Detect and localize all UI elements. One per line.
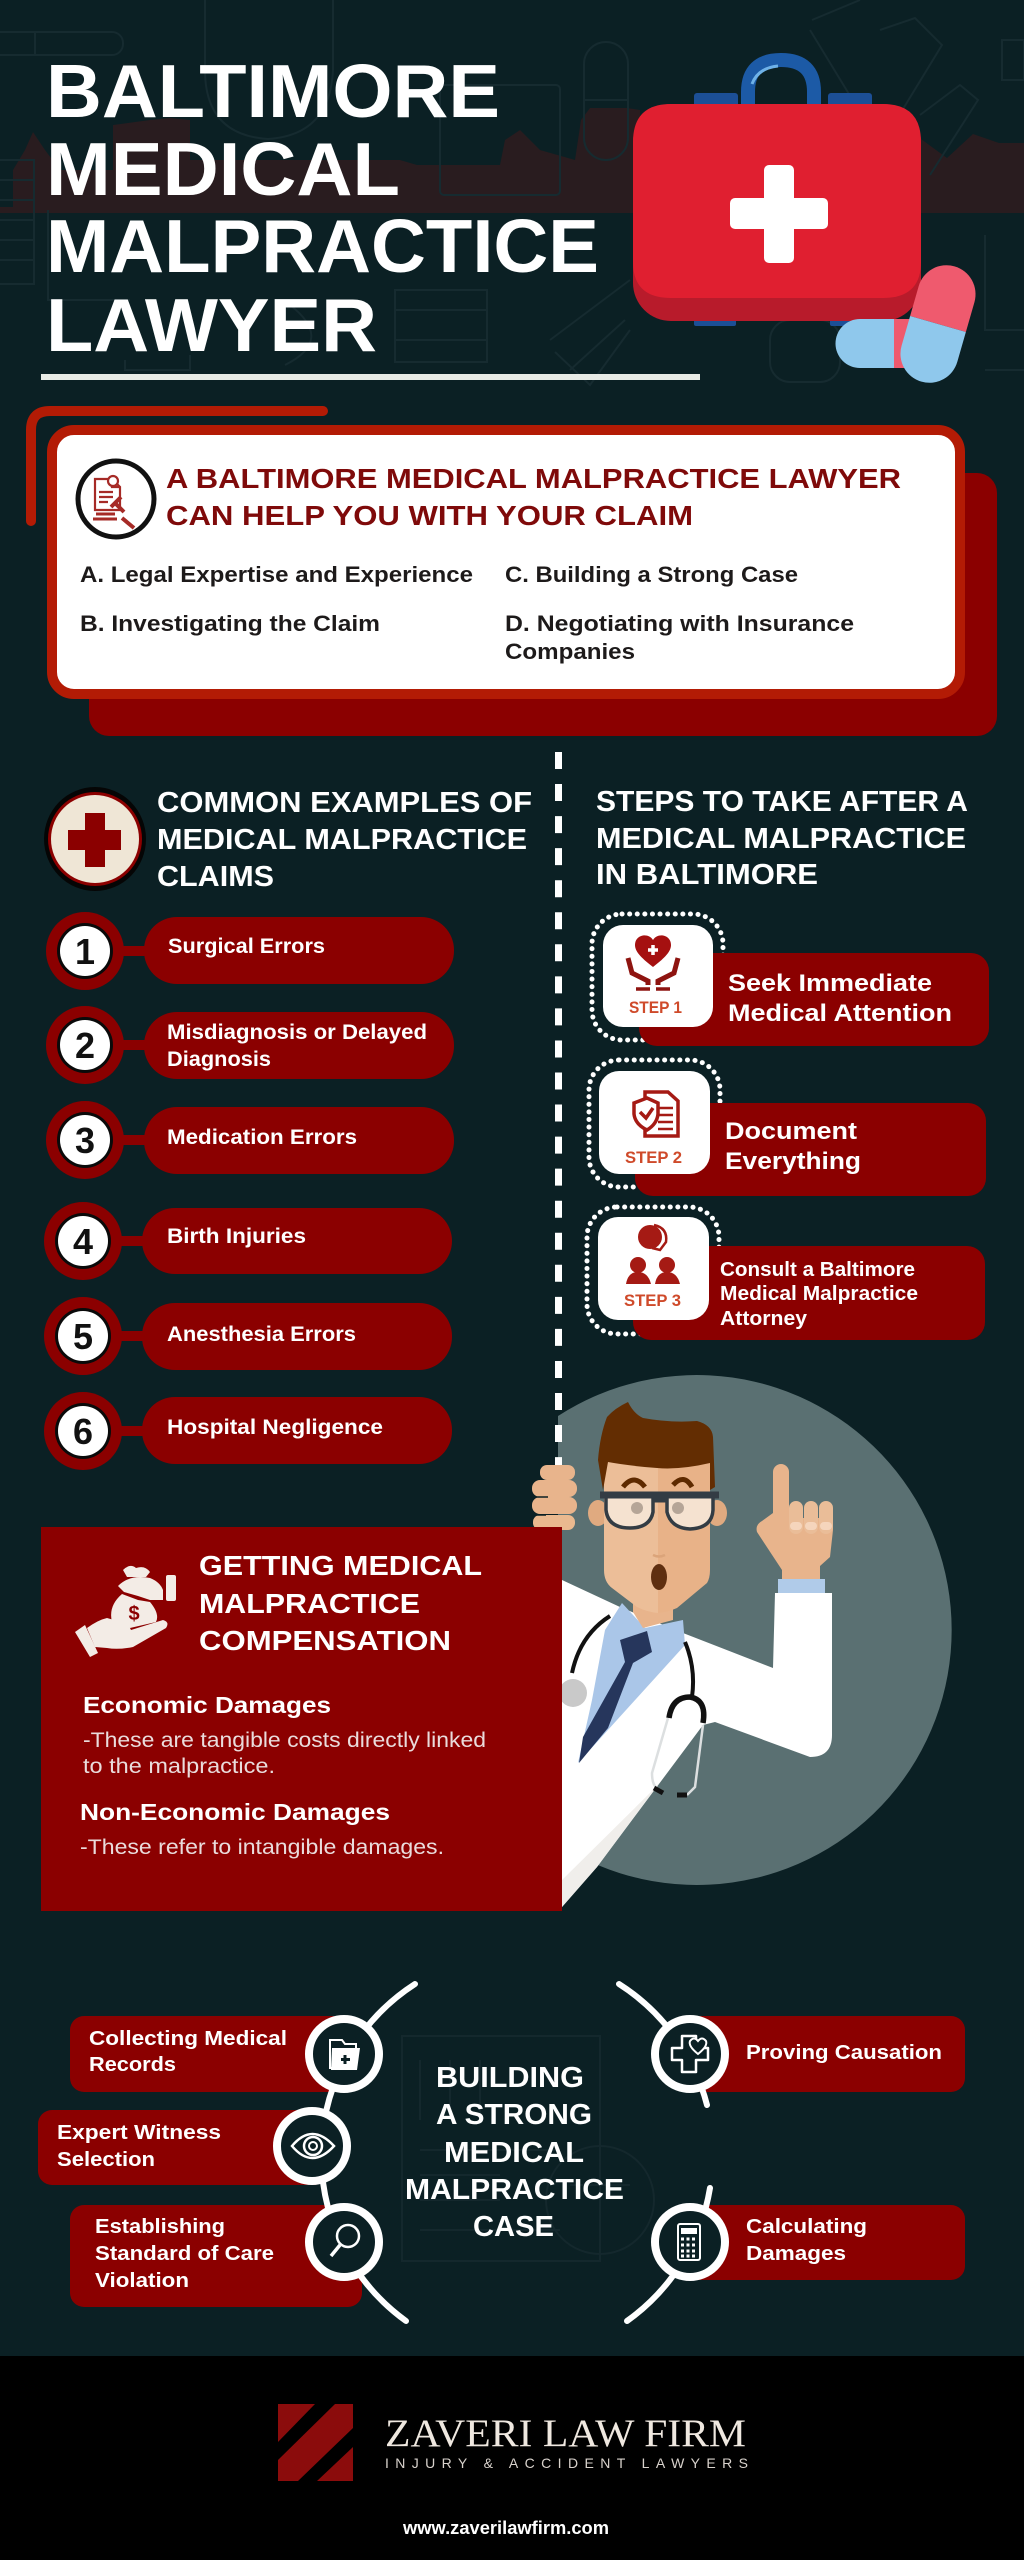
step 1: seek medical attention: Seek Immediate xyxy=(728,970,932,997)
website: www.zaverilawfirm.com xyxy=(402,2518,609,2538)
item: calculating damages xyxy=(685,2205,965,2280)
item: expert witness selection xyxy=(38,2110,328,2185)
step 1: seek medical attention xyxy=(592,914,989,1046)
list item 1: surgical errors xyxy=(46,912,454,990)
heading xyxy=(405,2062,624,2243)
list item 2: misdiagnosis: 2 xyxy=(75,1025,95,1066)
backdrop circle behind doctor xyxy=(558,1375,952,1885)
list item 5: anesthesia errors: 5 xyxy=(73,1316,93,1357)
heading: CAN HELP YOU WITH YOUR CLAIM xyxy=(166,500,693,531)
heading xyxy=(166,463,901,531)
step 3: consult an attorney xyxy=(587,1207,985,1340)
left arc connector xyxy=(321,1984,415,2321)
heading: CASE xyxy=(473,2211,554,2243)
item: collecting medical records: Collecting Medical xyxy=(89,2028,287,2050)
icon circle: calculator xyxy=(655,2207,725,2277)
tie xyxy=(579,1631,652,1763)
icon: two people talking xyxy=(626,1225,680,1284)
list item 4: birth injuries: Birth Injuries xyxy=(167,1225,306,1248)
step 1: seek medical attention: Medical Attention xyxy=(728,1000,952,1027)
list item 2: misdiagnosis xyxy=(46,1006,454,1084)
economic damages: -These are tangible costs directly linked xyxy=(83,1729,486,1752)
list item 3: medication errors: Medication Errors xyxy=(167,1126,357,1149)
section heading: common examples: COMMON EXAMPLES OF xyxy=(157,787,532,819)
heading: BUILDING xyxy=(436,2062,584,2094)
icon circle: eye xyxy=(277,2111,347,2181)
list item 6: hospital negligence: Hospital Negligence xyxy=(167,1416,383,1439)
economic damages xyxy=(83,1692,486,1778)
heading: A STRONG xyxy=(436,2099,592,2131)
list item 1: surgical errors: Surgical Errors xyxy=(168,935,325,958)
pointing hand xyxy=(757,1464,833,1593)
list of ways a lawyer helps: A. Legal Expertise and Experience xyxy=(80,562,473,587)
list item 3: medication errors: 3 xyxy=(75,1120,95,1161)
heading: A BALTIMORE MEDICAL MALPRACTICE LAWYER xyxy=(166,463,901,494)
item: proving causation: Proving Causation xyxy=(746,2042,942,2064)
icon: document and gavel xyxy=(78,461,154,537)
list item 5: anesthesia errors: Anesthesia Errors xyxy=(167,1323,356,1346)
list item 4: birth injuries xyxy=(44,1202,452,1280)
list of ways a lawyer helps: D. Negotiating with Insurance xyxy=(505,611,854,636)
item: proving causation xyxy=(685,2016,965,2092)
non-economic damages: -These refer to intangible damages. xyxy=(80,1836,444,1859)
illustration: doctor pointing up xyxy=(532,1402,833,1907)
icon: hand holding money bag: $ xyxy=(128,1603,140,1625)
item: establishing standard of care: Establishing xyxy=(95,2216,225,2238)
list item 2: misdiagnosis: Diagnosis xyxy=(167,1048,271,1071)
step 3: consult an attorney: Medical Malpractice xyxy=(720,1283,918,1305)
icon: medical cross badge xyxy=(44,787,146,891)
section heading: common examples: CLAIMS xyxy=(157,861,274,893)
section heading: common examples xyxy=(44,787,532,893)
footer band xyxy=(0,2356,1024,2560)
section heading: common examples: MEDICAL MALPRACTICE xyxy=(157,824,527,856)
logo mark xyxy=(278,2404,353,2481)
section heading: steps to take: IN BALTIMORE xyxy=(596,859,818,891)
economic damages: to the malpractice. xyxy=(83,1755,275,1778)
section heading: steps to take: STEPS TO TAKE AFTER A xyxy=(596,786,968,818)
list item 2: misdiagnosis: Misdiagnosis or Delayed xyxy=(167,1021,427,1044)
panel: how a lawyer can help xyxy=(31,411,997,736)
title: BALTIMORE xyxy=(46,49,500,133)
title: MALPRACTICE xyxy=(46,204,599,288)
step 3: consult an attorney: Consult a Baltimore xyxy=(720,1259,915,1281)
icon circle: magnifier xyxy=(309,2207,379,2277)
heading: MALPRACTICE xyxy=(199,1588,420,1619)
step 3: consult an attorney: Attorney xyxy=(720,1308,808,1330)
item: collecting medical records: Records xyxy=(89,2054,176,2076)
icon: hand holding money bag xyxy=(75,1566,176,1657)
title xyxy=(46,49,599,367)
item: collecting medical records xyxy=(70,2016,360,2092)
left hand xyxy=(532,1465,577,1530)
heading xyxy=(199,1550,482,1656)
non-economic damages xyxy=(80,1799,444,1859)
white coat xyxy=(562,1580,832,1907)
list of ways a lawyer helps: B. Investigating the Claim xyxy=(80,611,380,636)
heading: MALPRACTICE xyxy=(405,2174,624,2206)
right arc connectors xyxy=(619,1984,710,2321)
economic damages: Economic Damages xyxy=(83,1692,331,1718)
list item 4: birth injuries: 4 xyxy=(73,1221,93,1262)
icon: heart in hands xyxy=(628,935,678,989)
step 2: document everything xyxy=(589,1060,986,1196)
firm name: ZAVERI LAW FIRM xyxy=(385,2412,746,2455)
item: calculating damages: Damages xyxy=(746,2243,846,2265)
stethoscope xyxy=(559,1616,704,1795)
icon: document and shield xyxy=(634,1092,678,1136)
neck xyxy=(633,1600,673,1628)
list item 5: anesthesia errors xyxy=(44,1297,452,1375)
list of ways a lawyer helps: C. Building a Strong Case xyxy=(505,562,798,587)
item: calculating damages: Calculating xyxy=(746,2216,867,2238)
non-economic damages: Non-Economic Damages xyxy=(80,1799,390,1825)
item: establishing standard of care: Violation xyxy=(95,2270,189,2292)
title: LAWYER xyxy=(46,283,377,367)
step 3: consult an attorney: STEP 3 xyxy=(624,1291,681,1310)
list item 6: hospital negligence: 6 xyxy=(73,1411,93,1452)
step 2: document everything: Everything xyxy=(725,1148,861,1175)
list item 3: medication errors xyxy=(46,1101,454,1179)
icon circle: folder xyxy=(309,2019,379,2089)
list of ways a lawyer helps xyxy=(80,562,854,664)
icon: first aid kit xyxy=(633,60,921,326)
icon circle: cross and heart xyxy=(655,2019,725,2089)
icon: pills xyxy=(835,258,982,390)
glasses xyxy=(600,1495,719,1529)
tagline: INJURY & ACCIDENT LAWYERS xyxy=(385,2455,748,2471)
section heading: steps to take xyxy=(596,786,968,891)
list of ways a lawyer helps: Companies xyxy=(505,639,635,664)
item: establishing standard of care xyxy=(70,2205,362,2307)
item: establishing standard of care: Standard of Care xyxy=(95,2243,274,2265)
mouth xyxy=(651,1564,667,1590)
heading: GETTING MEDICAL xyxy=(199,1550,482,1581)
title: MEDICAL xyxy=(46,127,400,211)
step 2: document everything: Document xyxy=(725,1118,857,1145)
head xyxy=(588,1402,727,1613)
panel: getting compensation xyxy=(41,1527,562,1911)
shirt xyxy=(578,1603,685,1763)
step 2: document everything: STEP 2 xyxy=(625,1148,682,1167)
heading: COMPENSATION xyxy=(199,1625,451,1656)
section heading: steps to take: MEDICAL MALPRACTICE xyxy=(596,823,966,855)
item: expert witness selection: Selection xyxy=(57,2149,155,2171)
step 1: seek medical attention: STEP 1 xyxy=(629,998,682,1017)
item: expert witness selection: Expert Witness xyxy=(57,2122,221,2144)
section: building a strong case xyxy=(38,1984,965,2321)
list item 1: surgical errors: 1 xyxy=(75,931,95,972)
list item 6: hospital negligence xyxy=(44,1392,452,1470)
heading: MEDICAL xyxy=(444,2137,584,2169)
